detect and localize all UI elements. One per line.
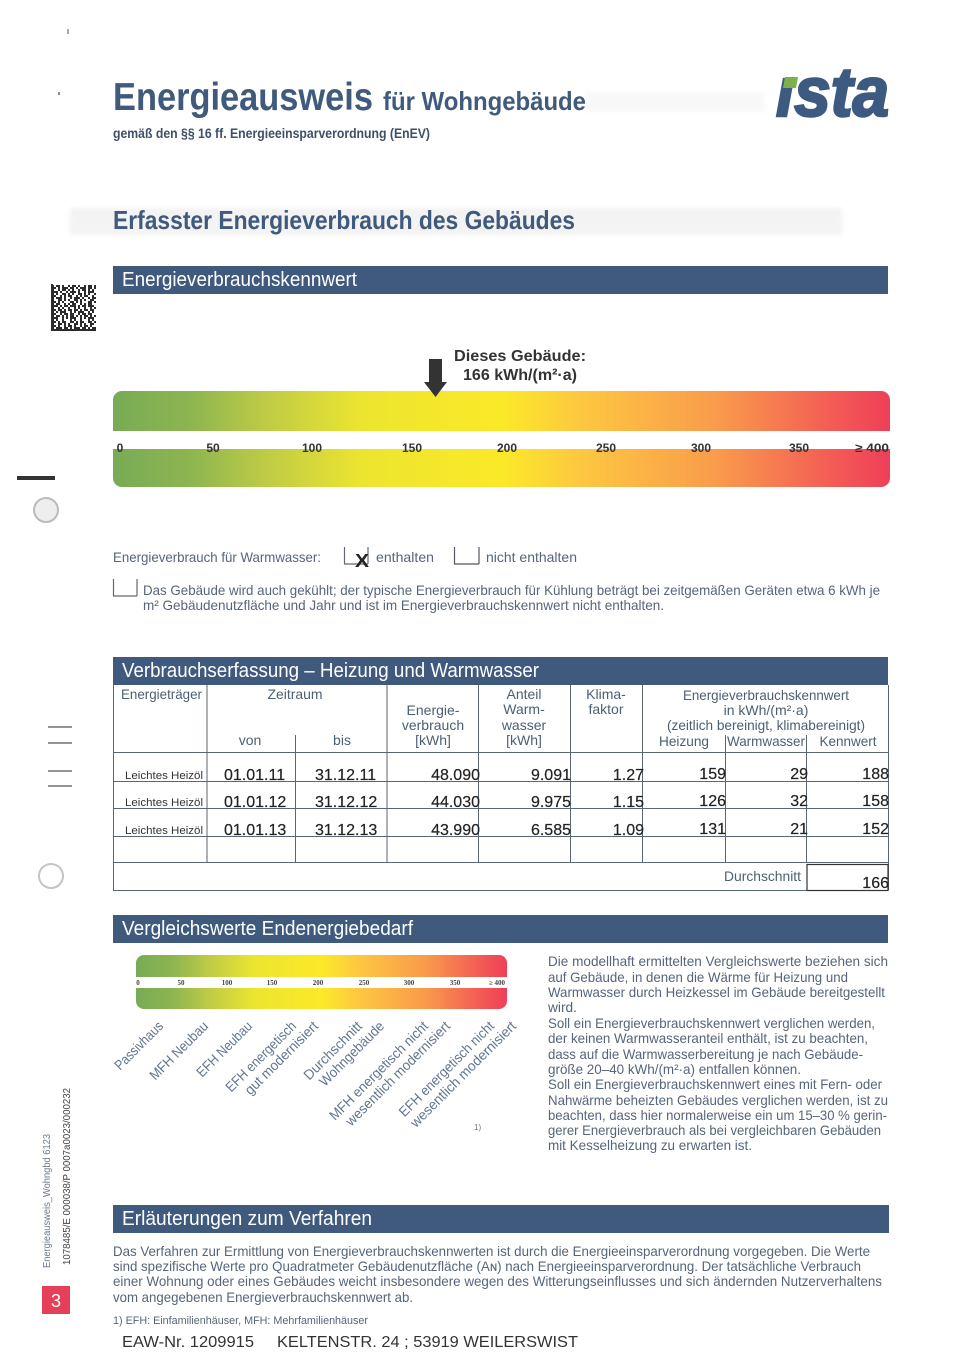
rotated building type labels: wesentlich modernisiert [341,1018,453,1130]
table rows: 1.15 [613,794,644,811]
table rows: 1.09 [613,822,644,839]
warm water legend: nicht enthalten [486,549,577,565]
table rows: 131 [699,821,726,838]
page number [42,1286,70,1314]
rotated building type labels: 1) [474,1123,481,1132]
section bar: Erläuterungen [113,1205,889,1233]
rotated building type labels [111,1018,519,1132]
table header: [kWh] [415,732,451,748]
section bar: Vergleichswerte [113,915,888,943]
section bar: Erläuterungen: Erläuterungen zum Verfahren [122,1208,372,1230]
callout: this building: Dieses Gebäude: [454,348,586,365]
table rows: Leichtes Heizöl [125,770,203,782]
warm water legend: Energieverbrauch für Warmwasser: [113,549,321,565]
table rows: 152 [862,821,889,838]
table header: verbrauch [402,717,464,733]
comparison scale bar: 250 [359,979,370,987]
scale labels: 250 [596,441,616,455]
table header: Energie- [407,702,460,718]
table header: bis [333,732,351,748]
average row [724,864,889,892]
scale labels: 100 [302,441,322,455]
table header: Kennwert [820,733,877,749]
comparison explanation text: mit Kesselheizung zu erwarten ist. [548,1137,752,1153]
method text: sind spezifische Werte pro Quadratmeter Gebäudenutzfläche (Aɴ) nach Energieeinsparverordnung. Der tatsächliche Verbrauch [113,1258,861,1274]
scale labels: 300 [691,441,711,455]
comparison explanation text: auf Gebäude, in denen die Wärme für Heizung und [548,969,848,985]
table rows: Leichtes Heizöl [125,825,203,837]
comparison explanation text: der keinen Warmwasseranteil enthält, ist zu beachten, [548,1030,868,1046]
rotated building type labels: wesentlich modernisiert [406,1018,519,1131]
comparison explanation text [547,953,888,1153]
subtitle: gemäß den §§ 16 ff. Energieeinsparverordnung (EnEV) [113,125,430,141]
table header: von [239,732,261,748]
page number: 3 [51,1291,61,1311]
table header: Warmwasser [727,733,805,749]
average row: Durchschnitt [724,868,801,884]
comparison explanation text: wird. [547,999,577,1015]
table rows: 31.12.12 [315,794,377,811]
table rows: 44.030 [431,794,480,811]
table header: wasser [501,717,547,733]
table header: Heizung [659,733,709,749]
rotated building type labels: EFH Neubau [193,1018,255,1080]
table header: Klima- [586,686,626,702]
comparison explanation text: Soll ein Energieverbrauchskennwert verglichen werden, [548,1015,875,1031]
table header: Energieträger [121,686,202,702]
cooling note: m² Gebäudenutzfläche und Jahr und ist im Energieverbrauchskennwert nicht enthalten. [143,597,664,613]
table rows: 9.091 [531,767,571,784]
section bar: Vergleichswerte: Vergleichswerte Endenergiebedarf [122,918,413,940]
rotated building type labels: MFH Neubau [146,1018,211,1083]
scale labels [117,441,889,455]
table title bar [113,657,888,685]
table rows [125,766,889,839]
rotated building type labels: EFH energetisch nicht [395,1018,497,1120]
table rows: 6.585 [531,822,571,839]
method text: vom angegebenen Energieverbrauchskennwert ab. [113,1289,413,1305]
table rows: 1.27 [613,767,644,784]
warm water legend [113,547,577,571]
address line [122,1334,578,1351]
title: für Wohngebäude [383,86,586,116]
table rows: 29 [790,766,808,783]
heading: Erfasster Energieverbrauch des Gebäudes [113,205,575,235]
table rows: 01.01.11 [224,767,285,784]
ghost show-through [70,92,842,235]
icon: ista logo: ısta [776,53,889,131]
rotated building type labels: MFH energetisch nicht [326,1018,431,1123]
arrow [424,359,447,397]
side print codes: Energieausweis_Wohngbd 6123 [42,1134,53,1268]
scale labels: 200 [497,441,517,455]
comparison scale bar: 300 [404,979,415,987]
section bar: Energieverbrauchskennwert: Energieverbrauchskennwert [122,269,357,291]
address line: KELTENSTR. 24 ; 53919 WEILERSWIST [277,1334,578,1351]
scale labels: ≥ 400 [855,441,889,455]
table rows: 31.12.13 [315,822,377,839]
comparison explanation text: Warmwasser durch Heizkessel im Gebäude bereitgestellt [548,984,885,1000]
table rows: Leichtes Heizöl [125,797,203,809]
comparison explanation text: beachten, dass hier normalerweise ein um 15–30 % gerin- [548,1107,887,1123]
table header: faktor [588,701,624,717]
comparison scale bar: 0 [136,979,140,987]
comparison explanation text: Nahwärme beheizten Gebäudes verglichen werden, ist zu [548,1092,888,1108]
comparison scale bar: 200 [313,979,324,987]
comparison scale bar [133,955,509,1009]
address line: EAW-Nr. 1209915 [122,1334,254,1351]
method text: Das Verfahren zur Ermittlung von Energieverbrauchskennwerten ist durch die Energieeinsparverordnung vorgegeben. Die Werte [113,1243,870,1259]
panel: consumption table [113,657,889,892]
footnote: 1) EFH: Einfamilienhäuser, MFH: Mehrfamilienhäuser [113,1315,368,1327]
scale bar [110,391,893,487]
method text [113,1243,882,1305]
comparison scale bar: 350 [450,979,461,987]
callout: this building: 166 kWh/(m²·a) [463,367,577,384]
comparison explanation text: Soll ein Energieverbrauchskennwert eines mit Fern- oder [548,1076,882,1092]
table rows: 126 [699,793,726,810]
rotated building type labels: EFH energetisch [222,1018,299,1095]
table rows: 48.090 [431,767,480,784]
table rows: 188 [862,766,889,783]
side print codes: 1078485/E 000038/P 0007a0023/000232 [62,1088,73,1265]
warm water legend: enthalten [376,549,434,565]
scale labels: 150 [402,441,422,455]
table rows: 01.01.12 [224,794,286,811]
comparison explanation text: Die modellhaft ermittelten Vergleichswerte beziehen sich [548,953,888,969]
table header: Zeitraum [268,686,322,702]
table rows: 01.01.13 [224,822,286,839]
rotated building type labels: Wohngebäude [316,1018,387,1089]
table title bar: Verbrauchserfassung – Heizung und Warmwasser [122,660,539,682]
table header: in kWh/(m²·a) [724,702,808,718]
table rows: 31.12.11 [315,767,376,784]
callout: this building [454,348,586,384]
section bar: Energieverbrauchskennwert [113,266,888,294]
table rows: 21 [790,821,808,838]
comparison explanation text: gerer Energieverbrauch als bei vergleichbaren Gebäuden [548,1122,881,1138]
table rows: 159 [699,766,726,783]
comparison scale bar: 50 [178,979,185,987]
table rows: 32 [790,793,808,810]
scale labels: 350 [789,441,809,455]
cooling note [114,579,880,613]
scale labels: 0 [117,441,124,455]
table header: Energieverbrauchskennwert [683,687,849,703]
table rows: 43.990 [431,822,480,839]
warm water legend: X [355,551,369,571]
table header: (zeitlich bereinigt, klimabereinigt) [667,717,865,733]
title [113,76,586,119]
comparison explanation text: größe 20–40 kWh/(m²·a) entfallen können. [548,1061,801,1077]
title: Energieausweis [113,76,373,119]
rotated building type labels: gut modernisiert [241,1018,321,1098]
average row: 166 [862,875,889,892]
table rows: 158 [862,793,889,810]
table rows: 9.975 [531,794,571,811]
icon: data matrix code [51,283,97,331]
table header: Anteil [506,686,542,702]
comparison explanation text: dass auf die Warmwasserbereitung je nach Gebäude- [548,1046,863,1062]
cooling note: Das Gebäude wird auch gekühlt; der typische Energieverbrauch für Kühlung beträgt bei zeitgemäßen Geräten etwa 6 kWh je [143,582,880,598]
side print codes [42,1088,73,1268]
comparison scale bar: 150 [267,979,278,987]
scale labels: 50 [206,441,220,455]
comparison scale bar: 100 [222,979,233,987]
table header: Warm- [503,701,545,717]
rotated building type labels: Passivhaus [111,1018,166,1073]
method text: einer Wohnung oder eines Gebäudes weicht insbesondere wegen des Witterungseinflusses und sich ändernden Nutzerverhaltens [113,1273,882,1289]
rotated building type labels: Durchschnitt [300,1018,365,1083]
table header: [kWh] [506,732,542,748]
comparison scale bar: ≥ 400 [489,979,506,987]
side margin: punch marks [17,29,72,888]
table header [121,686,877,749]
